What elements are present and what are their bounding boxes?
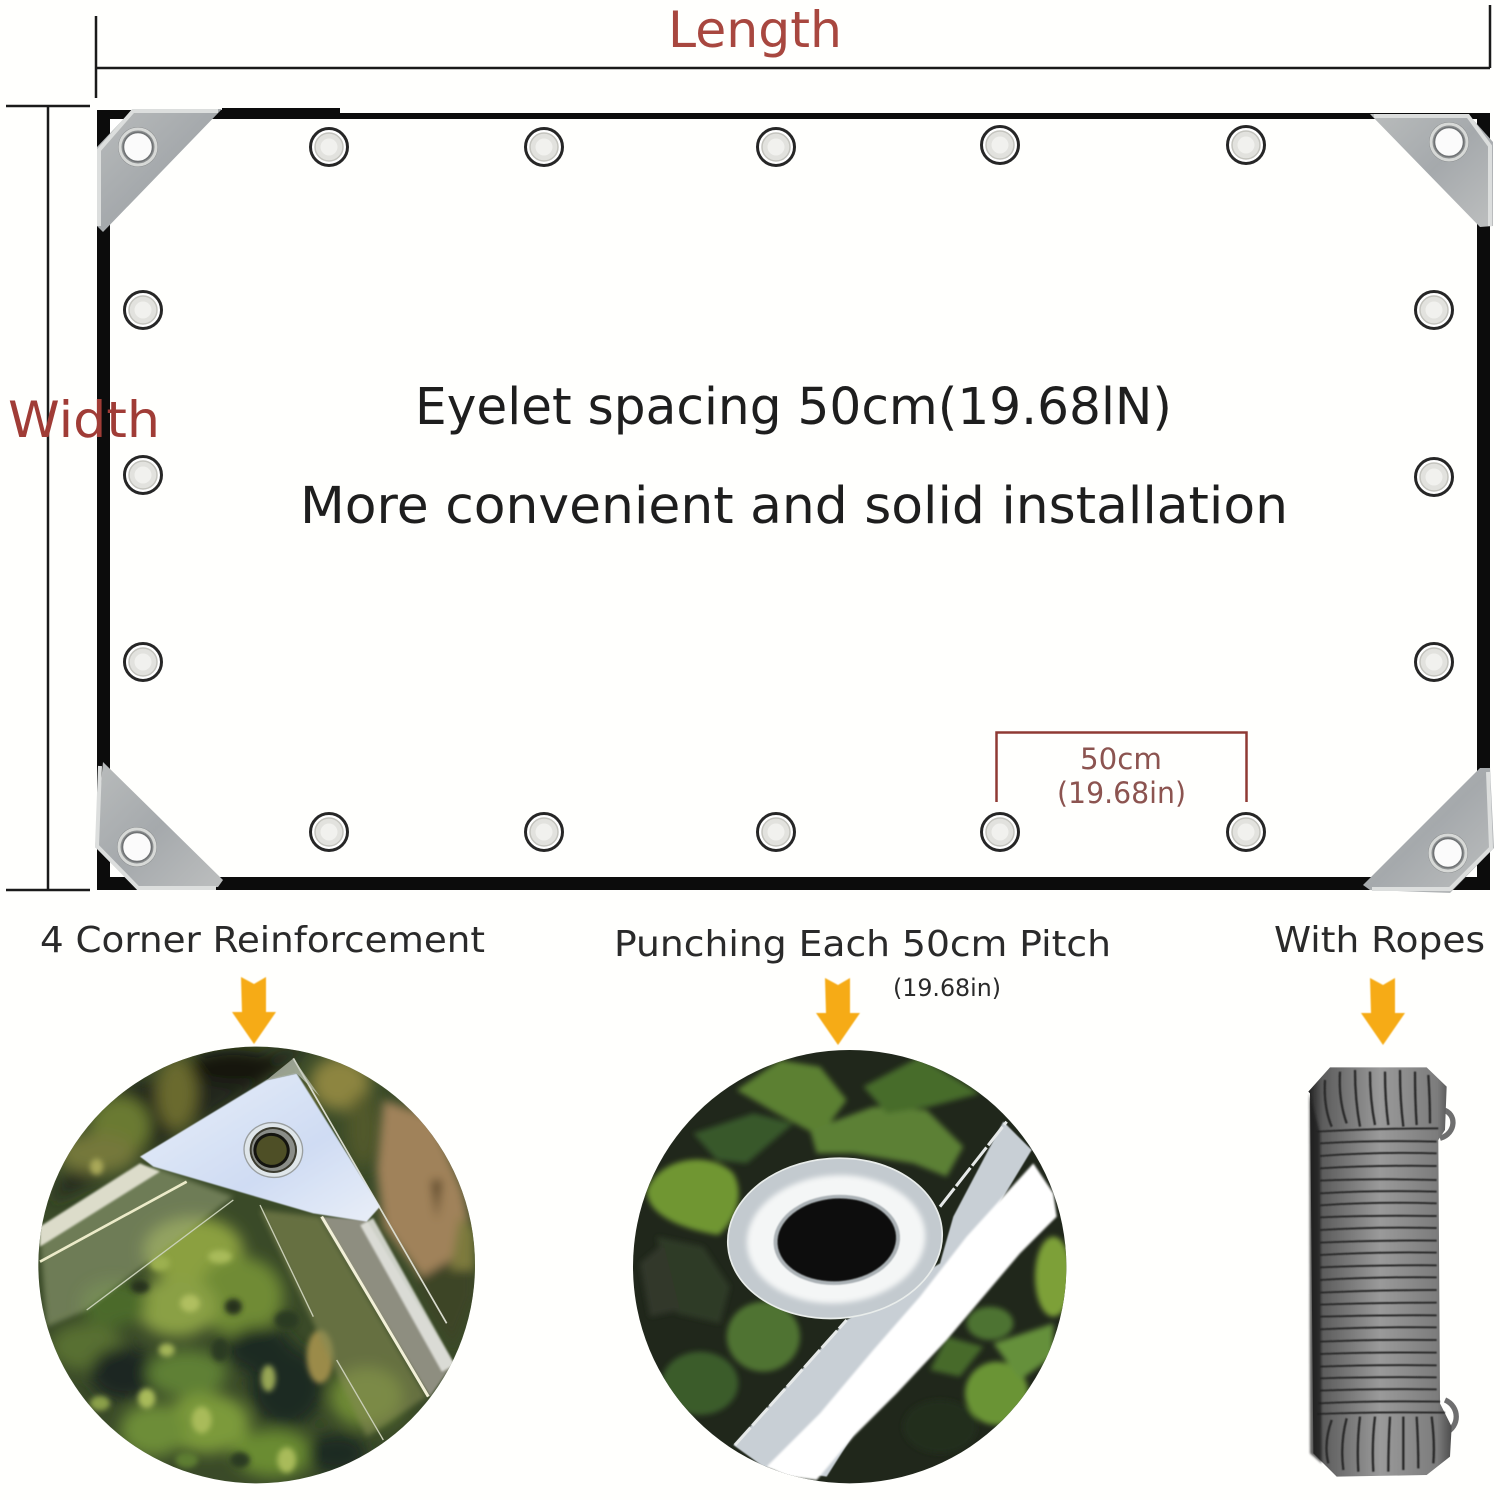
caption: ropes: With Ropes: [1274, 920, 1485, 961]
plate: top left: [97, 109, 222, 232]
caption: punching pitch: (19.68in): [893, 974, 1001, 1002]
spacing bracket callout: 50cm: [1080, 742, 1162, 776]
photo: punched eyelet detail: [633, 1050, 1066, 1484]
steel grommet: [726, 1157, 944, 1320]
white rolled edge: [767, 1163, 1057, 1480]
eyelet spacing headline: Eyelet spacing 50cm(19.68lN): [415, 378, 1172, 437]
eyelets: top row: [310, 126, 1264, 166]
sheet hem silver band: [733, 1122, 1032, 1477]
wooden post: [377, 1100, 475, 1347]
spacing bracket callout: [996, 732, 1246, 810]
eyelets: left column: [124, 292, 162, 680]
corner reinforcement plates: [95, 109, 1494, 893]
stitch line: [735, 1122, 1007, 1445]
rope silhouette: [1308, 1067, 1452, 1477]
arrow: corner reinforcement: [232, 977, 276, 1044]
installation headline: More convenient and solid installation: [300, 477, 1288, 536]
rope shadow side: [1309, 1093, 1322, 1463]
leaves: [640, 1057, 1072, 1453]
rope loops: [1440, 1110, 1456, 1433]
width dimension line: [6, 106, 90, 890]
photo: corner reinforcement detail: [38, 1046, 475, 1484]
plate: top right: [1370, 114, 1493, 227]
length dimension line: [96, 5, 1490, 98]
grommet: [243, 1122, 304, 1178]
photo: coiled rope bundle: [1308, 1067, 1456, 1477]
width label: Width: [8, 391, 160, 449]
spacing bracket callout: (19.68in): [1057, 776, 1186, 810]
tarpaulin panel: [95, 108, 1494, 893]
plate: bottom left: [95, 762, 223, 890]
clear sheet hems: [40, 1058, 453, 1440]
corner reinforcement patch: [140, 1073, 380, 1222]
length label: Length: [668, 1, 842, 59]
coil strands: [1317, 1128, 1445, 1414]
mottled leaf texture: [90, 1159, 333, 1473]
background foliage: [50, 1043, 403, 1477]
arrow: ropes: [1361, 978, 1405, 1045]
eyelets: right column: [1416, 292, 1452, 680]
caption: corner reinforcement: 4 Corner Reinforcement: [40, 920, 485, 961]
caption: punching pitch: [614, 924, 1111, 1002]
eyelets: bottom row: [310, 814, 1264, 850]
arrow: punching pitch: [816, 978, 860, 1045]
sheet frame: [97, 108, 1490, 890]
bottom cap strands: [1326, 1417, 1434, 1472]
plate: bottom right: [1363, 768, 1494, 893]
top cap strands: [1325, 1070, 1430, 1127]
caption: punching pitch: Punching Each 50cm Pitch: [614, 924, 1111, 965]
